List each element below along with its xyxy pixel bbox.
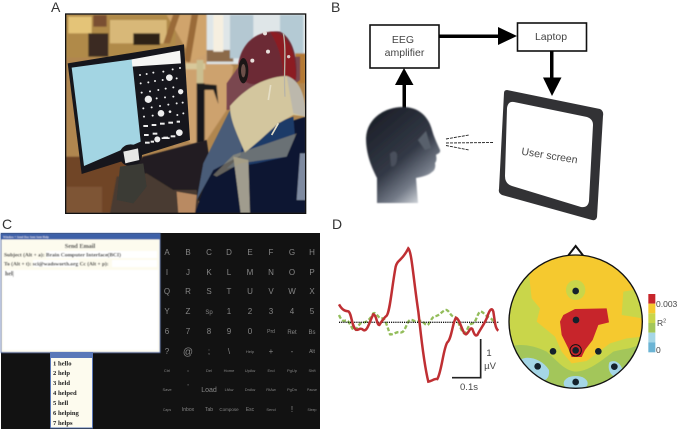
word prediction list: 3 held [53, 380, 70, 387]
keyboard grid: Z [186, 307, 191, 316]
keyboard grid: H [309, 248, 315, 257]
keyboard grid: Ret [287, 330, 297, 336]
word prediction list [50, 352, 92, 428]
keyboard grid: End [267, 368, 275, 373]
keyboard grid: 3 [269, 307, 274, 316]
word prediction list: 2 help [53, 370, 70, 377]
scale bar [452, 339, 481, 378]
email window: Send Email [65, 243, 95, 250]
arrow: head to amplifier [395, 68, 414, 109]
keyboard grid: O [289, 268, 295, 277]
panel D: ERP waveform [339, 248, 498, 393]
email window [1, 234, 160, 352]
label: D: D [332, 216, 342, 232]
word prediction list: 1 hello [53, 360, 72, 368]
keyboard grid: Home [224, 368, 235, 373]
green dashed trace [339, 310, 496, 334]
keyboard grid: 6 [165, 327, 170, 336]
keyboard grid: ? [165, 347, 170, 356]
keyboard grid: I [166, 268, 168, 277]
box: Laptop [518, 23, 586, 51]
keyboard grid: - [291, 347, 294, 356]
monitor [68, 44, 190, 174]
keyboard grid: X [309, 287, 315, 296]
keyboard grid: Prd [267, 329, 275, 335]
colour scale labels: 0 [656, 345, 661, 355]
zero baseline [339, 320, 498, 324]
keyboard grid: LfAw [225, 387, 234, 392]
keyboard grid: Caps [163, 408, 171, 412]
email window: To (Alt + t): sci@wadsworth.org Cc (Alt + p): [4, 260, 109, 268]
keyboard grid: Help [246, 349, 255, 354]
keyboard grid: C [206, 248, 212, 257]
keyboard grid: 9 [227, 327, 232, 336]
word prediction list: 7 helps [53, 420, 73, 427]
keyboard grid: M [247, 268, 254, 277]
keyboard grid: Compose [219, 407, 239, 412]
colour scale [648, 294, 655, 352]
panel C: speller interface [1, 233, 320, 429]
keyboard grid: 8 [207, 327, 212, 336]
keyboard grid: Ctrl [164, 368, 170, 373]
word prediction list: 6 helping [53, 410, 80, 417]
keyboard grid: R [185, 287, 191, 296]
email window: hel| [5, 272, 14, 278]
nose [568, 246, 583, 255]
keyboard grid: 1 [227, 307, 232, 316]
keyboard grid: Q [164, 287, 170, 296]
keyboard grid: PgDn [287, 387, 297, 392]
dark background [1, 233, 320, 429]
keyboard grid: Tab [205, 407, 213, 413]
keyboard grid: ' [187, 384, 189, 391]
panel D: ERP waveform: µV [484, 361, 497, 372]
keyboard grid: S [206, 287, 212, 296]
email window: Subject (Alt + a): Brain Computer Interface(BCI) [4, 252, 121, 258]
keyboard grid: 2 [248, 307, 253, 316]
box: Laptop: Laptop [535, 31, 567, 43]
keyboard grid: ! [291, 405, 293, 414]
label: C: C [2, 216, 12, 232]
keyboard grid: N [268, 268, 274, 277]
arrow: amplifier to laptop [439, 27, 517, 45]
keyboard grid: Bs [308, 330, 316, 336]
keyboard grid: UpAw [245, 368, 255, 373]
keyboard grid: + [269, 347, 274, 356]
keyboard grid: A [164, 248, 170, 257]
keyboard grid: Send [266, 407, 276, 412]
topographic map [509, 248, 642, 392]
colour scale labels: 2 [663, 318, 666, 324]
keyboard grid [162, 248, 317, 414]
keyboard grid: 5 [310, 307, 315, 316]
keyboard grid: Esc [246, 407, 255, 413]
room background [65, 14, 306, 213]
word prediction list: 4 helped [53, 390, 77, 397]
panel D: scalp topography [509, 246, 655, 392]
box: EEG amplifier: EEG [392, 34, 414, 46]
keyboard grid: Shft [308, 368, 316, 373]
photo frame [66, 14, 306, 213]
screen label: User screen [521, 146, 579, 166]
keyboard grid: W [288, 287, 296, 296]
keyboard grid: DnAw [245, 387, 255, 392]
keyboard grid: 7 [186, 327, 191, 336]
keyboard grid: Y [164, 307, 170, 316]
user screen [499, 90, 603, 220]
keyboard grid: Del [206, 368, 212, 373]
keyboard grid: U [247, 287, 253, 296]
panel A: photo of user at BCI monitor [65, 14, 306, 213]
scale label: amplitude: 1 [486, 348, 492, 359]
small tablet on stand [117, 144, 147, 203]
red trace [339, 248, 498, 382]
scale label: time: 0.1s [460, 382, 478, 393]
arrow: laptop to screen [543, 51, 562, 96]
word prediction list: 5 hell [53, 400, 68, 407]
keyboard grid: L [227, 268, 232, 277]
colour scale labels: 0.003 [656, 299, 678, 309]
keyboard grid: K [206, 268, 212, 277]
email window: Window + Send Doc Sent Sent Help [3, 235, 49, 239]
keyboard grid: D [226, 248, 232, 257]
head details and electrodes [238, 31, 290, 135]
keyboard grid: \ [228, 347, 231, 356]
box: EEG amplifier [370, 25, 439, 68]
keyboard grid: Load [201, 387, 217, 394]
keyboard grid: Sleep [308, 408, 317, 412]
keyboard grid: G [289, 248, 295, 257]
keyboard grid: ; [208, 347, 210, 356]
keyboard grid: V [268, 287, 274, 296]
dashed gaze lines [446, 135, 493, 150]
keyboard grid: E [247, 248, 253, 257]
colour scale labels: R [657, 318, 663, 328]
colour scale labels [656, 299, 678, 355]
keyboard grid: Alt [309, 349, 316, 355]
keyboard grid: T [227, 287, 232, 296]
keyboard grid: Inbox [182, 407, 195, 413]
keyboard grid: = [187, 368, 190, 373]
panel B: EEG system diagram [366, 23, 603, 220]
keyboard grid: @ [183, 347, 193, 358]
keyboard grid: Sp [205, 310, 213, 316]
keyboard grid: RtAw [266, 387, 276, 392]
keyboard grid: PgUp [287, 368, 298, 373]
keyboard grid: 4 [290, 307, 295, 316]
head silhouette [366, 107, 440, 203]
keyboard grid: B [185, 248, 191, 257]
electrodes [534, 288, 618, 385]
keyboard grid: J [186, 268, 190, 277]
keyboard grid: P [309, 268, 315, 277]
keyboard grid: Save [162, 387, 172, 392]
keyboard grid: 0 [248, 327, 253, 336]
keyboard grid: F [269, 248, 274, 257]
box: EEG amplifier: amplifier [385, 47, 425, 59]
person [110, 31, 306, 213]
head outline [509, 255, 642, 388]
keyboard grid: Pause [307, 388, 317, 392]
